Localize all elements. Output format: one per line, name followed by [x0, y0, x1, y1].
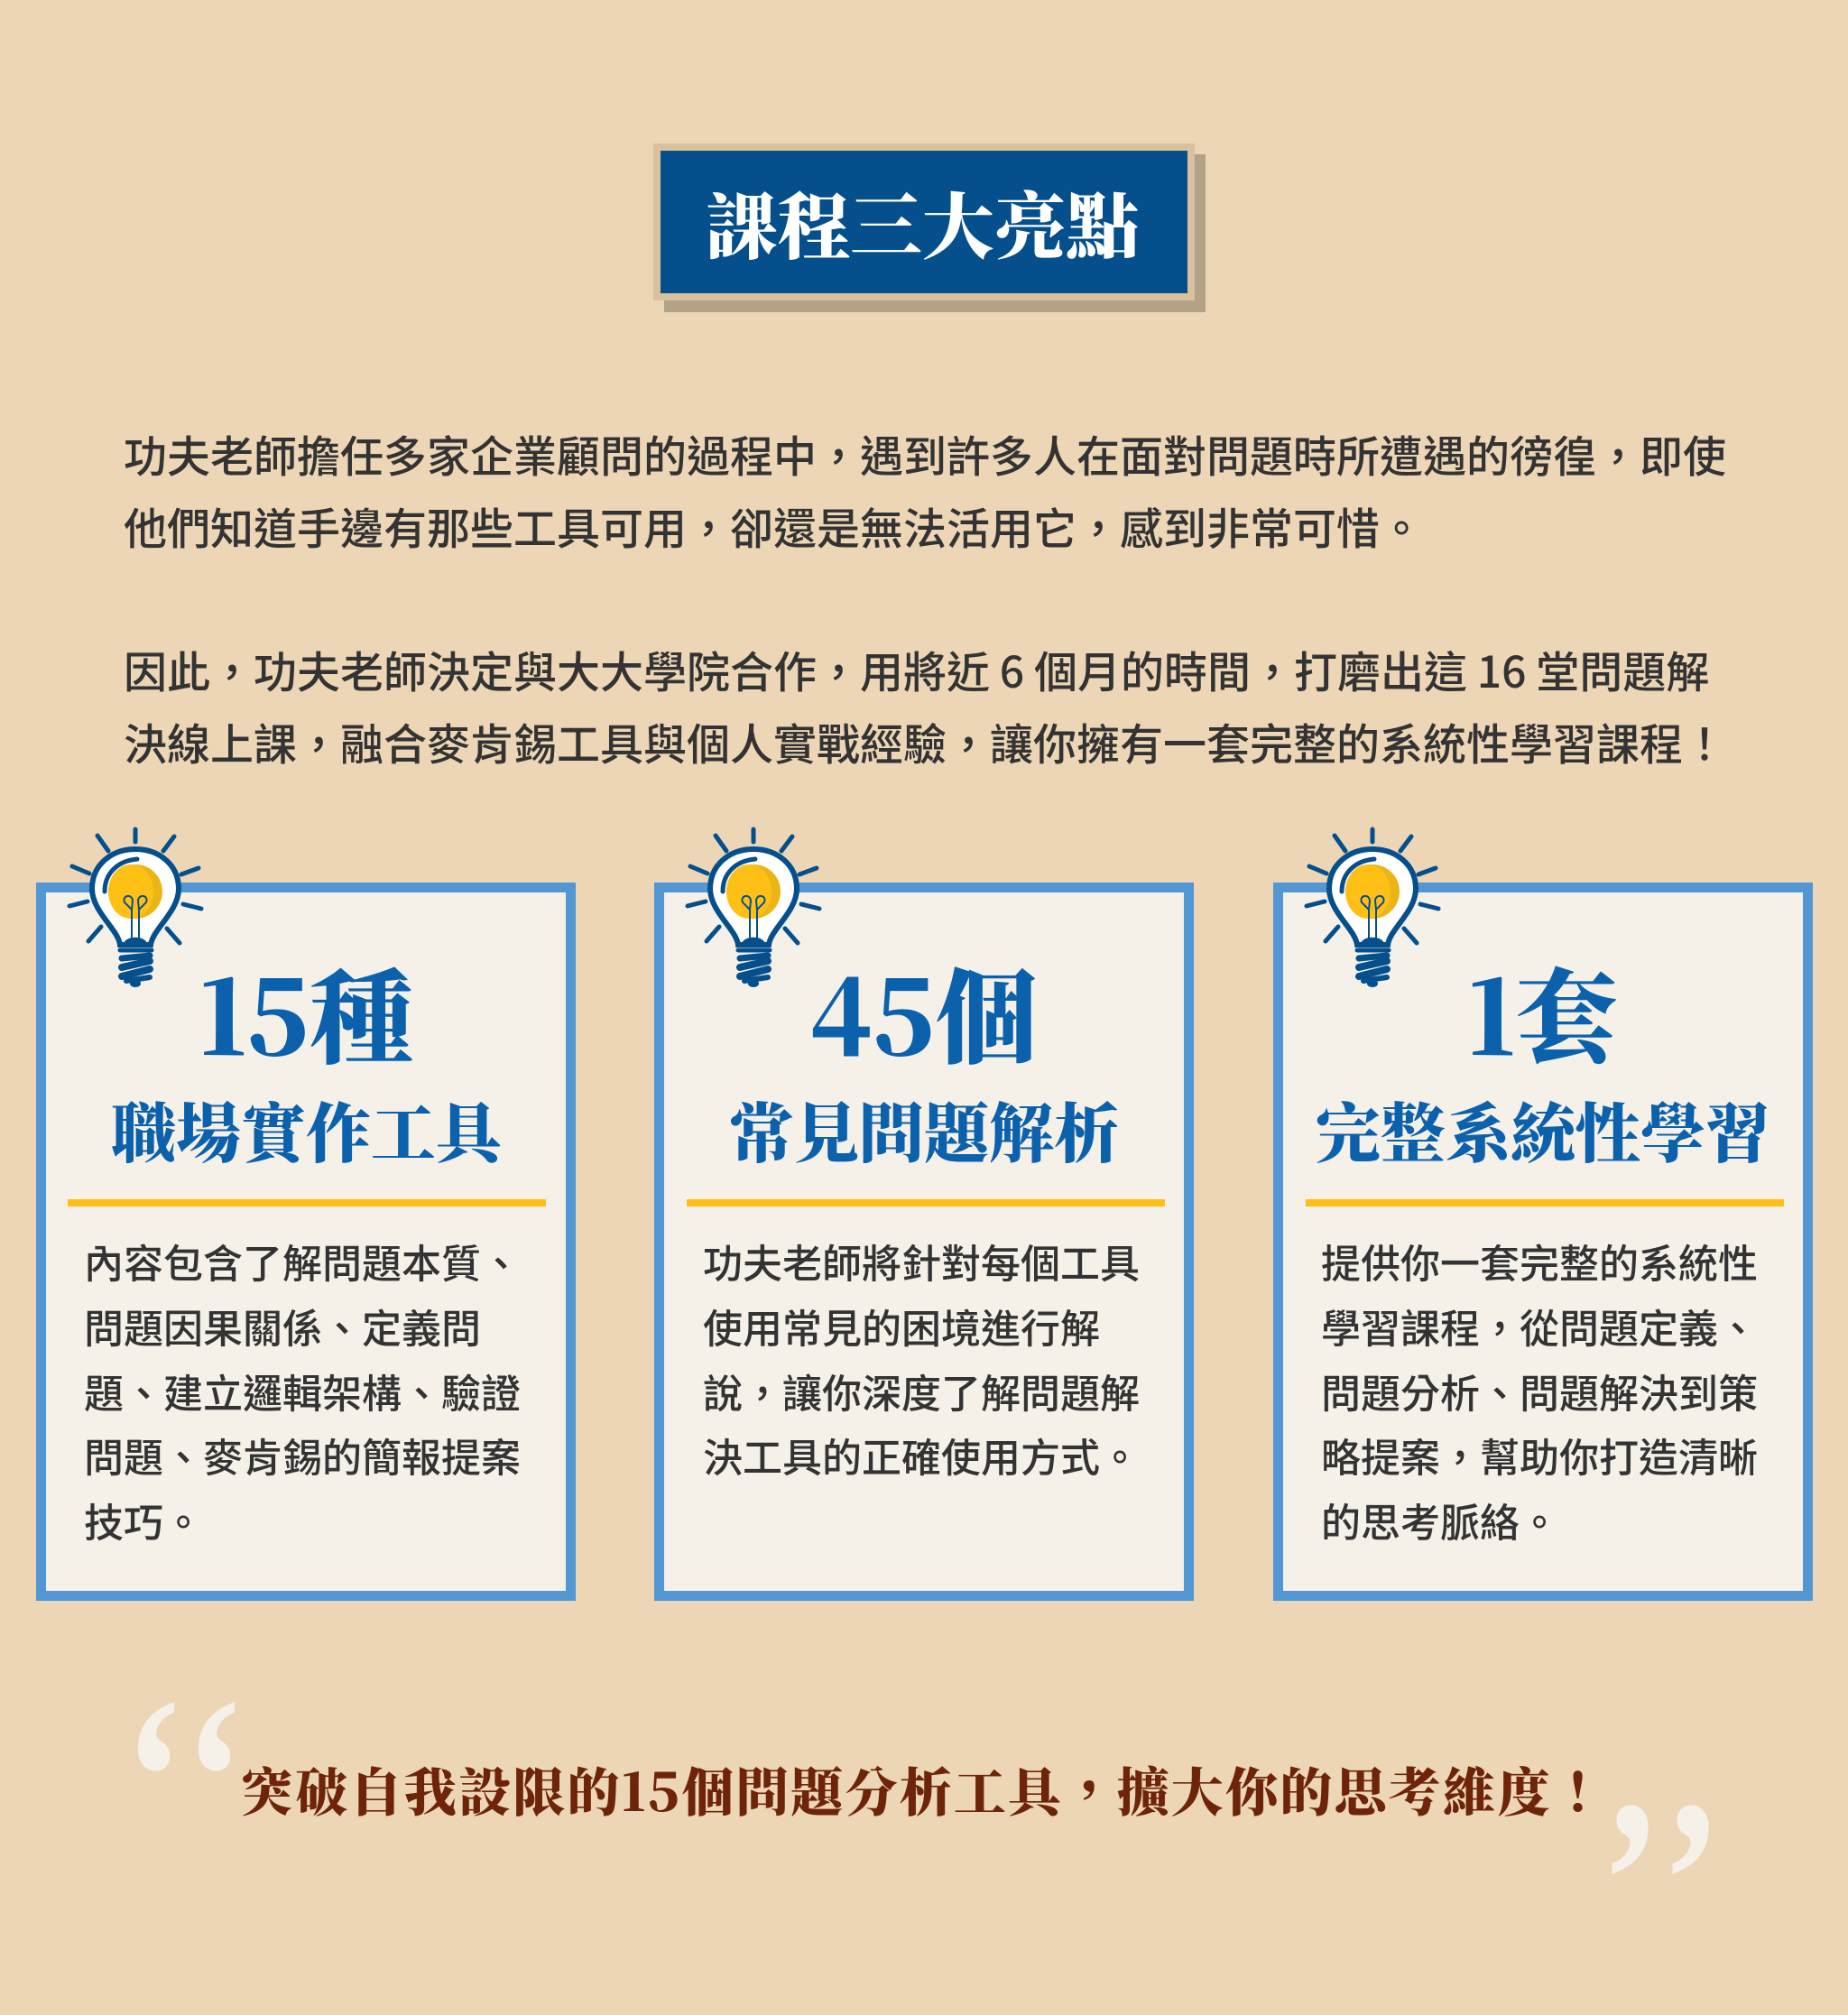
quote text: 突破自我設限的15個問題分析工具，擴大你的思考維度！	[241, 1751, 1606, 1826]
panel: card 2	[654, 827, 1194, 1601]
card 1 heading: 職場實作工具	[111, 1082, 501, 1176]
card 2 heading: 常見問題解析	[729, 1082, 1119, 1176]
card 3 body text: 提供你一套完整的系統性	[1321, 1232, 1758, 1289]
title banner	[653, 143, 1206, 312]
card 2 body text: 功夫老師將針對每個工具	[703, 1232, 1140, 1289]
intro paragraph 1: 功夫老師擔任多家企業顧問的過程中，遇到許多人在面對問題時所遭遇的徬徨，即使	[124, 421, 1726, 485]
closing quote mark: ’	[1661, 1753, 1722, 2006]
opening quote mark: ‘	[124, 1650, 184, 1903]
banner frame	[653, 143, 1195, 300]
card 3 heading: 完整系統性學習	[1316, 1082, 1770, 1176]
card 3 body text: 問題分析、問題解決到策	[1321, 1362, 1758, 1419]
card 3 body text: 略提案，幫助你打造清晰	[1321, 1426, 1758, 1484]
card 1 body text: 技巧。	[84, 1491, 203, 1548]
card 2 body text: 決工具的正確使用方式。	[703, 1426, 1140, 1484]
card 1 body text: 內容包含了解問題本質、	[84, 1232, 521, 1289]
card 2 body text	[703, 1232, 1140, 1484]
intro paragraph 2	[124, 637, 1726, 772]
card 1 body text: 問題因果關係、定義問	[84, 1297, 481, 1354]
card 3 body text: 的思考脈絡。	[1321, 1491, 1559, 1548]
card 2 number: 45個	[809, 937, 1039, 1085]
card 3 number: 1套	[1468, 937, 1618, 1085]
opening quote mark: ‘	[184, 1650, 245, 1903]
panel: card 3	[1273, 827, 1813, 1601]
card 2 body text: 說，讓你深度了解問題解	[703, 1362, 1140, 1419]
card 1 body text: 題、建立邏輯架構、驗證	[84, 1362, 521, 1419]
card 3 body text: 學習課程，從問題定義、	[1321, 1297, 1758, 1354]
closing quote mark	[1601, 1753, 1722, 2006]
card 1 number: 15種	[199, 937, 412, 1085]
intro paragraph 2: 決線上課，融合麥肯錫工具與個人實戰經驗，讓你擁有一套完整的系統性學習課程！	[124, 709, 1726, 772]
card 2 body text: 使用常見的困境進行解	[703, 1297, 1100, 1354]
intro paragraph 1	[124, 421, 1726, 557]
panel: card 1	[36, 827, 576, 1601]
title: 課程三大亮點	[706, 170, 1139, 273]
banner shadow	[664, 154, 1206, 312]
closing quote mark: ’	[1601, 1753, 1661, 2006]
banner fill	[661, 151, 1187, 293]
card 3 body text	[1321, 1232, 1758, 1548]
card 1 body text	[84, 1232, 521, 1548]
card 1 body text: 問題、麥肯錫的簡報提案	[84, 1426, 521, 1484]
opening quote mark	[124, 1650, 245, 1903]
intro paragraph 1: 他們知道手邊有那些工具可用，卻還是無法活用它，感到非常可惜。	[124, 494, 1423, 557]
intro paragraph 2: 因此，功夫老師決定與大大學院合作，用將近 6 個月的時間，打磨出這 16 堂問題解	[124, 637, 1709, 700]
